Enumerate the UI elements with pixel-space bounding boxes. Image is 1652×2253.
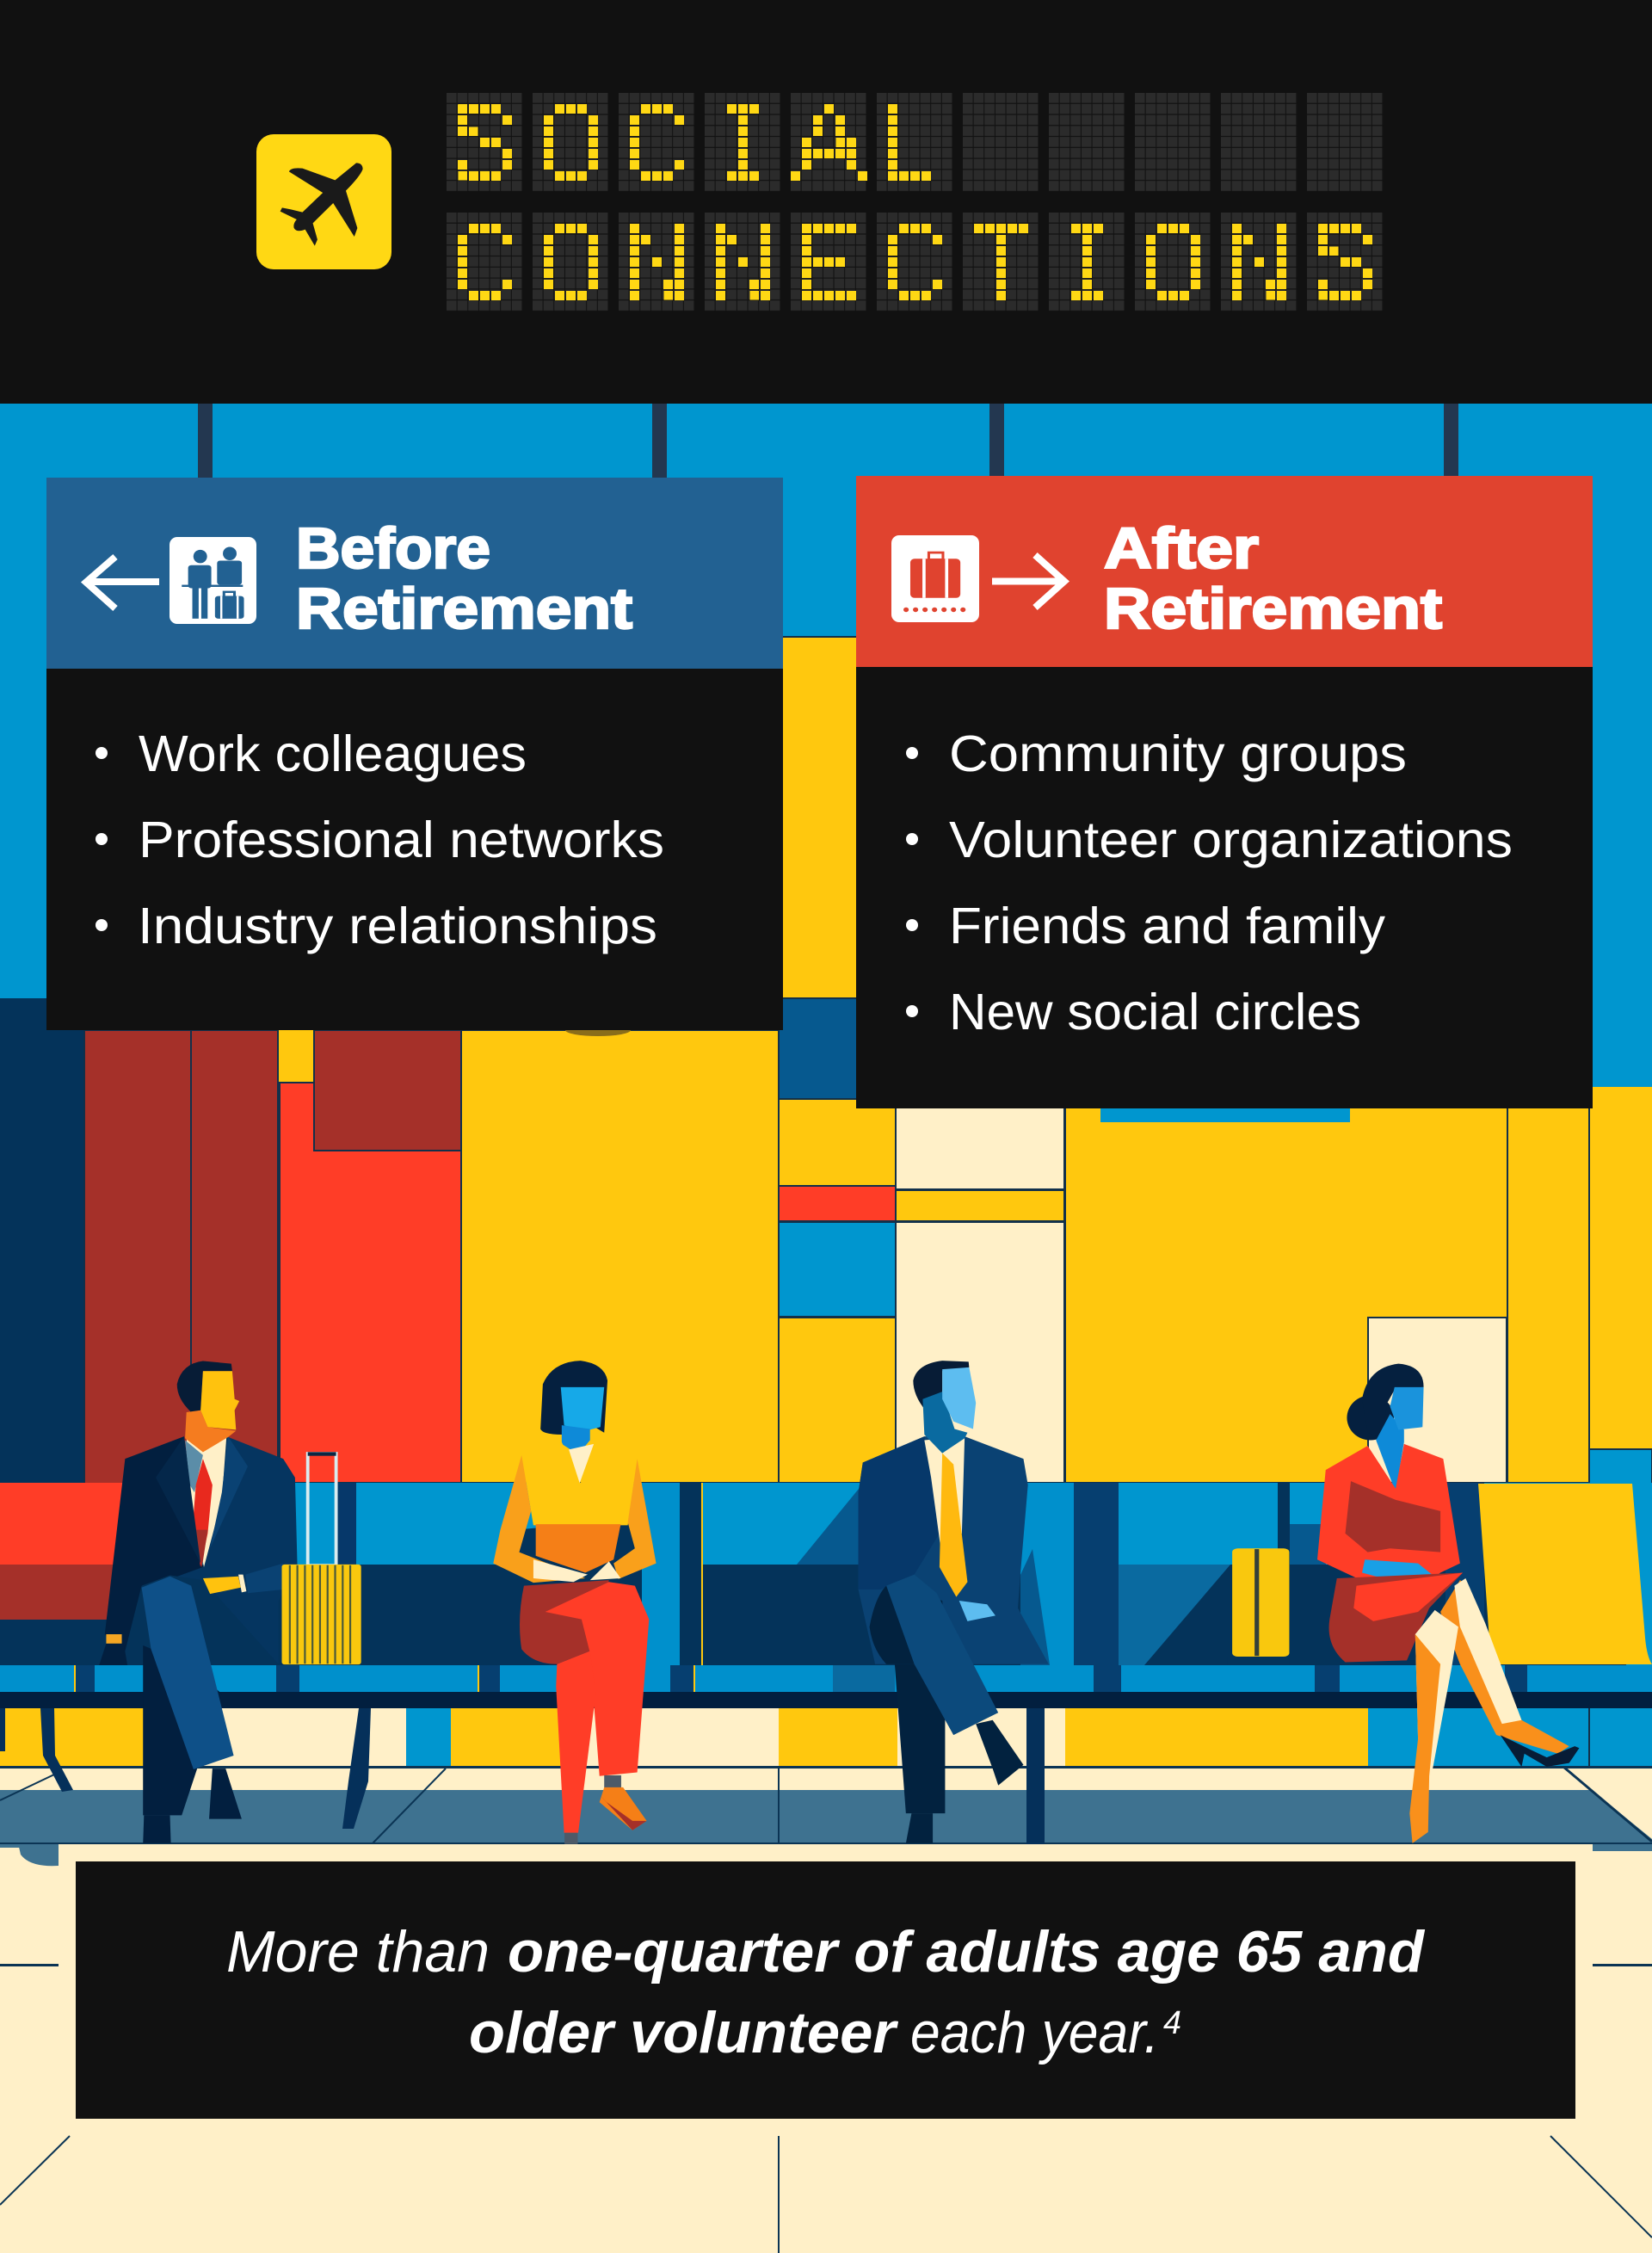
figure: man with yellow face (99, 1361, 298, 1843)
bench legs (0, 1708, 1045, 1844)
list: before retirement: Professional networks (139, 812, 664, 868)
figure: woman in red suit (1317, 1364, 1579, 1843)
list: before retirement: Industry relationships (138, 898, 657, 954)
title line: CONNECTIONS: N (707, 203, 778, 335)
list: after retirement (906, 725, 1513, 1040)
title line: SOCIAL: I (718, 83, 767, 215)
title line: SOCIAL: S (448, 84, 521, 215)
strip under bench (0, 1708, 1652, 1767)
list: before retirement (96, 725, 664, 954)
callout: volunteering statistic (76, 1861, 1575, 2119)
title line: CONNECTIONS: O (535, 203, 606, 335)
title line: SOCIAL: O (535, 83, 606, 215)
heading: after retirement: After (1104, 516, 1259, 581)
bench seat (0, 1665, 1652, 1708)
callout: volunteering statistic: 4 (1163, 2005, 1181, 2041)
list: after retirement: Friends and family (949, 898, 1386, 954)
bench backrest (0, 1483, 1652, 1665)
heading: before retirement: Retirement (296, 577, 632, 641)
title line: CONNECTIONS (447, 203, 1384, 335)
list: before retirement: Work colleagues (139, 725, 527, 782)
title: departure board (447, 83, 1384, 335)
title line: CONNECTIONS: T (965, 203, 1036, 335)
floor (0, 1766, 1652, 1844)
heading: before retirement (296, 516, 632, 641)
heading: after retirement: Retirement (1104, 577, 1442, 641)
title line: CONNECTIONS: S (1309, 204, 1381, 335)
callout: volunteering statistic: older volunteer (469, 2000, 899, 2065)
icon: yellow airplane badge (256, 134, 391, 269)
figure: woman in yellow top (493, 1361, 656, 1844)
list: after retirement: Volunteer organizations (949, 812, 1513, 868)
title line: CONNECTIONS: C (879, 203, 950, 335)
icon: left arrow (86, 557, 159, 608)
sign header: after (856, 476, 1593, 667)
title line: SOCIAL: C (621, 83, 692, 215)
title line: CONNECTIONS: N (621, 203, 692, 335)
callout: volunteering statistic: More than (226, 1919, 490, 1984)
panel: before retirement (46, 478, 783, 1030)
icon: baggage carousel (891, 535, 979, 622)
title line: CONNECTIONS: C (449, 203, 520, 335)
title line: SOCIAL (447, 83, 1384, 215)
title line: CONNECTIONS: O (1137, 203, 1208, 335)
sign header: before (46, 478, 783, 669)
icon: right arrow (992, 555, 1064, 608)
list: after retirement: Community groups (949, 725, 1407, 782)
cream lower area (0, 1844, 1652, 2253)
title line: CONNECTIONS: I (1063, 203, 1111, 335)
title line: SOCIAL: L (871, 83, 944, 215)
icon: yellow carry-on suitcase (1228, 1548, 1289, 1665)
sign hangers (198, 404, 1458, 478)
heading: before retirement: Before (296, 516, 490, 581)
yellow seat at right (1478, 1484, 1652, 1664)
callout: volunteering statistic: each year. (910, 2000, 1159, 2065)
title line: CONNECTIONS: N (1224, 203, 1294, 335)
title line: SOCIAL: A (790, 83, 867, 215)
heading: after retirement (1104, 516, 1442, 641)
panel: header band (0, 0, 1652, 404)
icon: people with luggage (170, 537, 256, 624)
figure: man with yellow tie (859, 1361, 1049, 1843)
callout: volunteering statistic: one-quarter of adults age 65 and (508, 1919, 1425, 1984)
icon: yellow rolling suitcase (282, 1452, 361, 1664)
background: airport wall blocks (0, 404, 1652, 1501)
list: after retirement: New social circles (949, 984, 1361, 1040)
panel: after retirement (856, 476, 1593, 1108)
title line: CONNECTIONS: E (793, 203, 864, 335)
